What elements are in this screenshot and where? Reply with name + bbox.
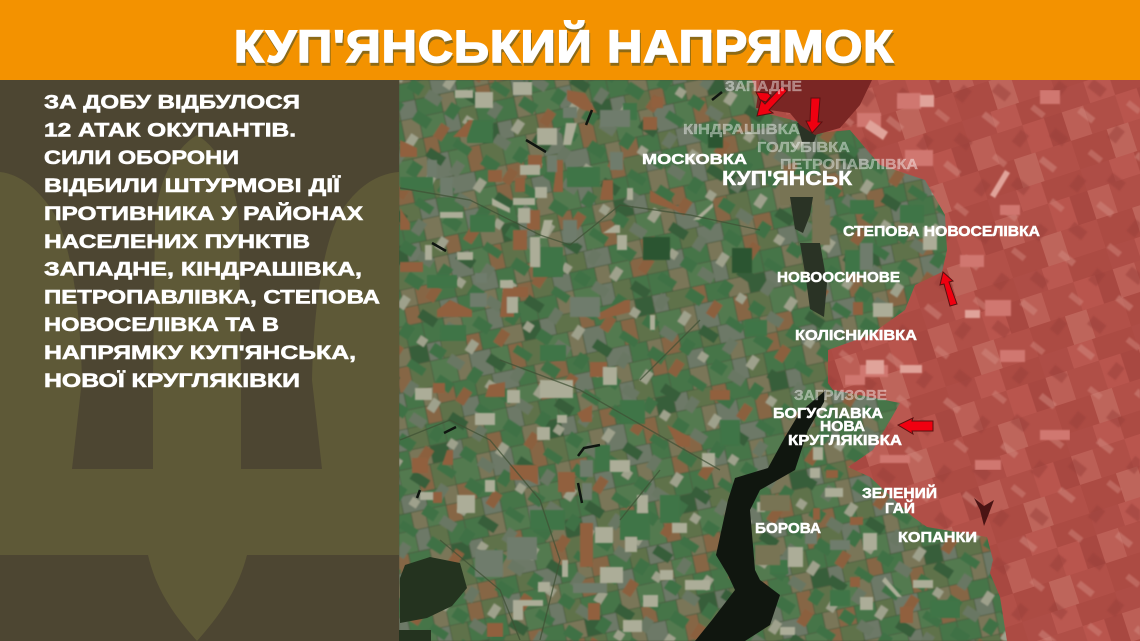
label: Novoosynove: НОВООСИНОВЕ <box>777 269 900 286</box>
map labels <box>642 78 1040 546</box>
forest: Kup'iansk river valley <box>790 123 827 317</box>
label: Kopanky: КОПАНКИ <box>898 529 977 546</box>
text block: attack summary: 12 АТАК ОКУПАНТІВ. <box>44 120 296 142</box>
header bar <box>0 0 1140 80</box>
text block: attack summary: ЗА ДОБУ ВІДБУЛОСЯ <box>44 92 300 114</box>
farm fields <box>400 82 960 637</box>
label: Borova: БОРОВА <box>755 520 821 537</box>
panel: summary background <box>0 80 399 641</box>
label: Kupiansk: КУП'ЯНСЬК <box>722 168 853 190</box>
label: Kindrashivka: КІНДРАШІВКА <box>683 121 800 138</box>
text block: attack summary: ВІДБИЛИ ШТУРМОВІ ДІЇ <box>44 174 341 197</box>
text block: attack summary: НАПРЯМКУ КУП'ЯНСЬКА, <box>44 342 356 364</box>
river: Oskil reservoir <box>695 390 826 641</box>
attack arrows <box>756 86 957 434</box>
text block: attack summary: СИЛИ ОБОРОНИ <box>44 147 239 169</box>
label: Kruhliakivka: КРУГЛЯКІВКА <box>788 432 902 449</box>
forest: south-west corner <box>399 557 467 641</box>
label: Stepova Novoselivka: СТЕПОВА НОВОСЕЛІВКА <box>843 223 1040 240</box>
arrow: Zapadne small <box>756 92 771 102</box>
label: Holubivka: ГОЛУБІВКА <box>757 139 850 156</box>
label: Moskovka: МОСКОВКА <box>642 151 747 168</box>
label: Kolisnykivka: КОЛІСНИКІВКА <box>795 327 917 344</box>
arrow: Nova Kruhliakivka <box>898 418 933 434</box>
front-line dark zone <box>756 80 872 135</box>
label: Nova: НОВА <box>820 418 865 435</box>
icon: trident watermark <box>0 135 399 641</box>
arrow: Zapadne <box>757 86 787 116</box>
text block: attack summary: ЗАПАДНЕ, КІНДРАШІВКА, <box>44 258 362 280</box>
text block: attack summary: ПРОТИВНИКА У РАЙОНАХ <box>44 201 363 225</box>
arrow: Stepova Novoselivka <box>940 272 957 306</box>
field patchwork <box>399 80 1007 641</box>
occupied field patchwork <box>828 80 1140 641</box>
label: Zahryzove: ЗАГРИЗОВЕ <box>794 387 887 404</box>
label: Zelenyi: ЗЕЛЕНИЙ <box>862 484 937 502</box>
text block: attack summary: НОВОЇ КРУГЛЯКІВКИ <box>44 369 300 392</box>
label: Zapadne: ЗАПАДНЕ <box>725 78 802 95</box>
title: КУП'ЯНСЬКИЙ НАПРЯМОК <box>234 21 894 72</box>
occupied fields <box>845 90 1070 470</box>
label: Hai: ГАЙ <box>885 499 915 517</box>
streams and field roads <box>400 188 760 640</box>
label: Bohuslavka: БОГУСЛАВКА <box>773 405 883 422</box>
text block: attack summary: НАСЕЛЕНИХ ПУНКТІВ <box>44 231 310 253</box>
water in occupied zone <box>974 498 994 526</box>
text block: attack summary: НОВОСЕЛІВКА ТА В <box>44 314 279 336</box>
occupied territory <box>752 80 1140 641</box>
ponds and gullies <box>417 92 722 503</box>
satellite map <box>399 80 1140 641</box>
text block: attack summary: ПЕТРОПАВЛІВКА, СТЕПОВА <box>44 286 380 308</box>
arrow: Holubivka <box>806 98 822 133</box>
text block: attack summary <box>44 92 380 392</box>
label: Petropavlivka: ПЕТРОПАВЛІВКА <box>780 156 918 173</box>
tone overlay <box>399 80 1007 641</box>
